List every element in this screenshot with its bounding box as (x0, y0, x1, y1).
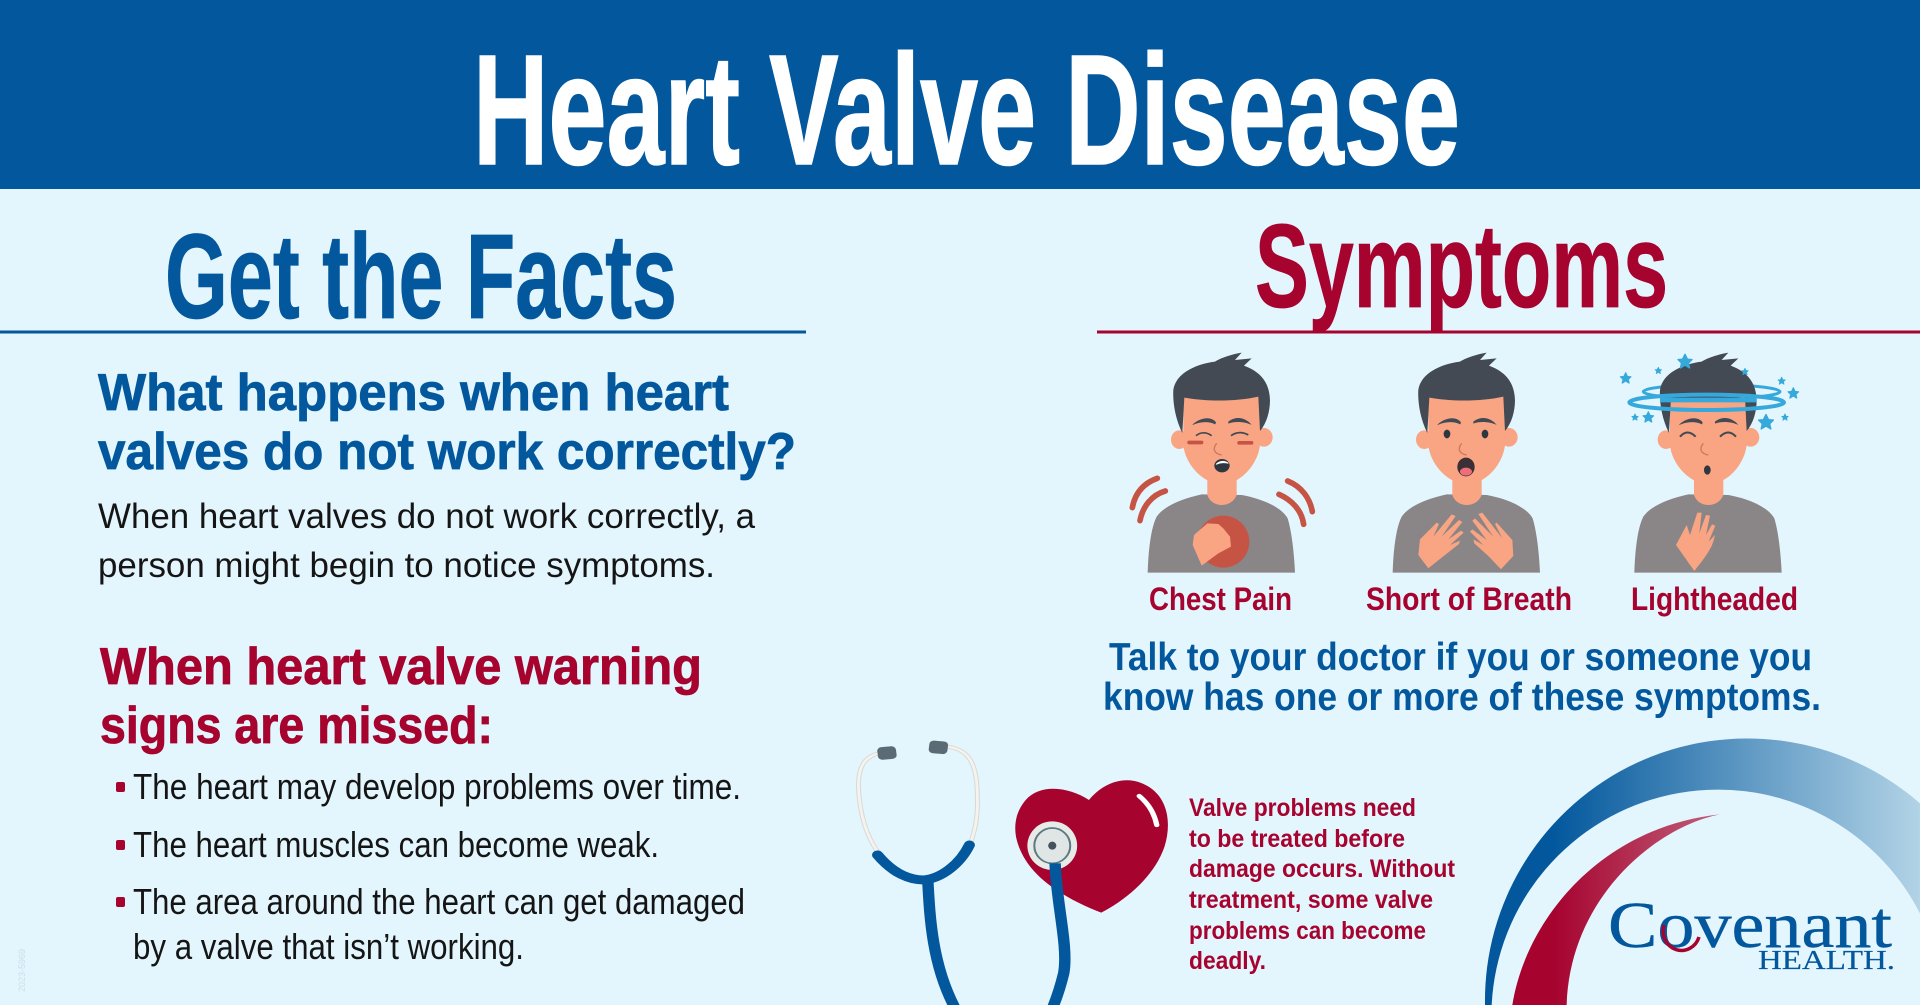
body text: person might begin to notice symptoms. (98, 546, 715, 585)
panel: symptoms (1097, 200, 1920, 719)
subheading: what happens: What happens when heart (98, 364, 729, 422)
callout: valve problems: Valve problems need (1189, 794, 1416, 822)
subheading: warning signs: signs are missed: (100, 697, 493, 755)
bullet list: The area around the heart can get damaged (133, 881, 745, 922)
title: Heart Valve Disease (473, 23, 1460, 198)
body text: When heart valves do not work correctly, a (98, 497, 756, 536)
callout: valve problems: treatment, some valve (1189, 886, 1433, 914)
symptom labels: Lightheaded (1631, 581, 1798, 617)
callout: valve problems: to be treated before (1189, 825, 1405, 853)
subheading: what happens (98, 364, 796, 481)
icon: lightheaded man (1620, 353, 1799, 573)
subheading: what happens: valves do not work correctly? (98, 423, 796, 481)
logo wordmark: Covenant (1608, 889, 1892, 962)
heading: get the facts: Get the Facts (165, 208, 677, 344)
bullet list: The heart muscles can become weak. (133, 824, 659, 865)
symptom labels: Short of Breath (1366, 581, 1572, 617)
panel: get the facts (0, 208, 806, 967)
advice text (1103, 636, 1821, 719)
subheading: warning signs (100, 638, 702, 755)
body text (98, 497, 756, 585)
advice text: Talk to your doctor if you or someone you (1109, 636, 1812, 679)
callout: valve problems: problems can become (1189, 917, 1426, 945)
icon: stethoscope and heart (858, 740, 1168, 1005)
logo swirl (1663, 925, 1699, 950)
logo wordmark: HEALTH. (1758, 945, 1895, 975)
watermark code: 2023-5969 (17, 949, 27, 992)
bullet list: by a valve that isn’t working. (133, 926, 524, 967)
icon: chest pain man (1132, 353, 1312, 573)
callout: valve problems: damage occurs. Without (1189, 855, 1456, 883)
callout: valve problems (1189, 794, 1456, 975)
symptom labels (1149, 581, 1798, 617)
icon: short of breath man (1393, 353, 1540, 573)
logo: covenant health (1485, 738, 1920, 1005)
header banner (0, 0, 1920, 198)
callout: valve problems: deadly. (1189, 947, 1266, 975)
heading: symptoms: Symptoms (1255, 200, 1668, 333)
bullet list: The heart may develop problems over time. (133, 766, 741, 807)
subheading: warning signs: When heart valve warning (100, 638, 702, 696)
advice text: know has one or more of these symptoms. (1103, 676, 1821, 719)
logo arcs (1485, 738, 1920, 1005)
bullet list (116, 766, 745, 967)
symptom labels: Chest Pain (1149, 581, 1292, 617)
